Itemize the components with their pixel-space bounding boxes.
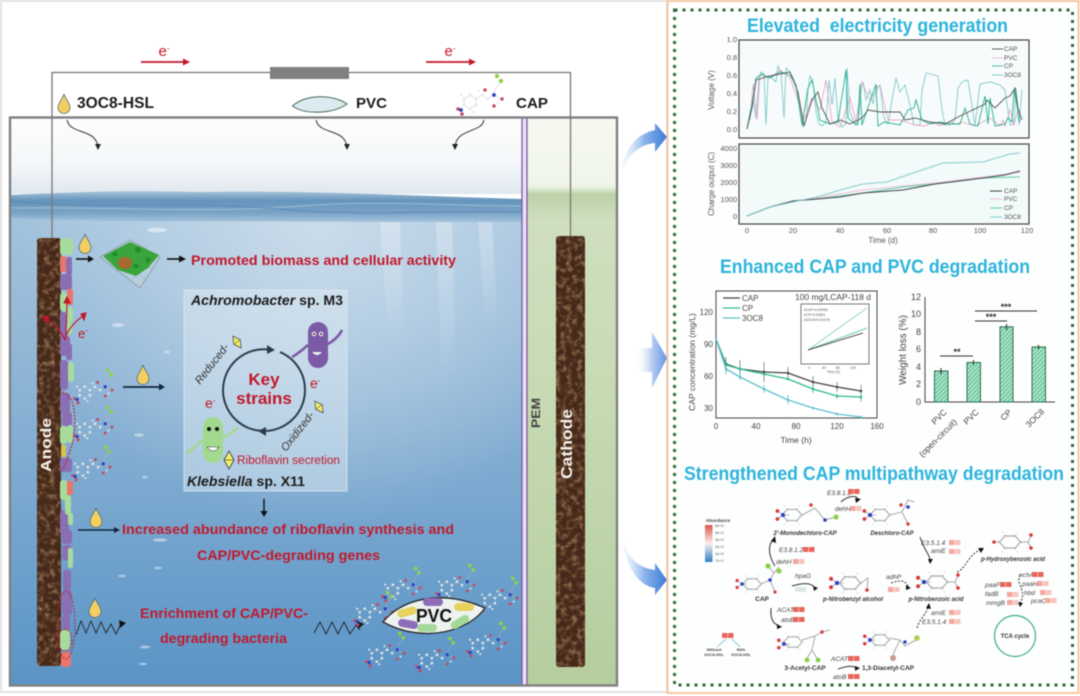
charge y axis labels bbox=[720, 144, 737, 221]
enzyme labels: ACAT bbox=[830, 656, 849, 663]
oxidized label: Oxidized- bbox=[279, 410, 317, 454]
bars bbox=[934, 327, 1046, 402]
electron arrow left: e bbox=[158, 43, 167, 60]
enzyme labels: E3.5.1.4 bbox=[921, 540, 946, 547]
enzyme labels: hbd bbox=[1024, 590, 1035, 597]
molecule: p-Hydroxybenzoic acid bbox=[980, 531, 1046, 563]
legend: CP bbox=[742, 304, 753, 313]
chart: charge output bbox=[707, 144, 1033, 245]
enzyme labels: dehH bbox=[776, 559, 792, 566]
y tick labels: 4 bbox=[916, 362, 921, 372]
time axis title: Time (d) bbox=[868, 236, 898, 245]
input: CAP bbox=[456, 74, 548, 116]
PEM label: PEM bbox=[529, 398, 543, 428]
anode chamber water bbox=[10, 218, 522, 685]
voltage legend bbox=[992, 46, 1021, 79]
electron arrow right: e bbox=[444, 43, 453, 60]
inset plot: 40 bbox=[822, 366, 826, 370]
time axis labels: 120 bbox=[1021, 226, 1033, 235]
inset plot: kCP=0.00501 bbox=[804, 313, 825, 317]
arrow: to pathways bbox=[622, 538, 667, 595]
electron arrow left: - bbox=[167, 44, 170, 53]
significance brackets bbox=[940, 311, 1037, 356]
electrons in cycle: - bbox=[213, 396, 216, 405]
riboflavin icon top bbox=[230, 334, 244, 350]
redox cycle bbox=[223, 349, 305, 431]
panel: microbial fuel cell bbox=[10, 43, 617, 686]
voltage legend: PVC bbox=[1004, 55, 1018, 62]
enzyme labels: E3.8.1.2 bbox=[827, 490, 852, 497]
inset plot: k3OC8=0.01078 bbox=[804, 318, 830, 322]
inset plot: 80 bbox=[836, 366, 840, 370]
enzyme labels: amiE bbox=[931, 610, 946, 617]
charge legend bbox=[990, 188, 1021, 221]
significance stars bbox=[953, 302, 1012, 357]
enzyme labels: mmgB bbox=[986, 600, 1005, 607]
voltage trace CP bbox=[747, 70, 1020, 129]
molecule: Deschloro-CAP: Deschloro-CAP bbox=[870, 530, 914, 537]
electrons in cycle: e bbox=[205, 395, 213, 411]
error bars bbox=[941, 324, 1038, 374]
row: gene abundance: CAP/PVC-degrading genes bbox=[197, 547, 380, 563]
cathode bbox=[556, 236, 585, 667]
x tick labels: 40 bbox=[752, 422, 761, 431]
enzyme labels: adhP bbox=[886, 574, 902, 581]
icon: biofilm on mesh bbox=[100, 240, 160, 288]
CAP molecules around PVC bbox=[353, 564, 518, 672]
series 3OC8 bbox=[716, 339, 862, 418]
enzyme labels: fadB bbox=[985, 591, 999, 598]
arrow: to degradation bbox=[637, 332, 667, 388]
time axis labels: 100 bbox=[974, 226, 986, 235]
abundance legend: 8e+2 bbox=[715, 523, 725, 528]
x tick labels: 80 bbox=[792, 422, 801, 431]
row: biomass: Promoted biomass and cellular activity bbox=[191, 252, 456, 268]
sample key: Without bbox=[707, 647, 722, 652]
bar labels: PVC bbox=[929, 407, 949, 427]
inset plot: 120 bbox=[850, 366, 856, 370]
inset plot: 0 bbox=[808, 366, 810, 370]
voltage axis title: Voltage (V) bbox=[707, 70, 716, 110]
light rays bbox=[380, 222, 498, 380]
enzyme labels bbox=[776, 490, 1046, 681]
x tick labels bbox=[714, 422, 884, 431]
arrow: to electricity bbox=[622, 123, 667, 168]
key strains label bbox=[236, 370, 292, 408]
y axis title: CAP concentration (mg/L) bbox=[687, 313, 697, 411]
tank outline bbox=[10, 118, 617, 686]
electrons in cycle: - bbox=[318, 376, 321, 385]
row: gene abundance bbox=[78, 508, 454, 563]
electron arrow left bbox=[141, 43, 190, 66]
input: 3OC8-HSL bbox=[58, 94, 154, 114]
redox cycle arrow heads bbox=[258, 345, 275, 436]
voltage trace CAP bbox=[747, 72, 1022, 129]
CAP molecules at anode bbox=[71, 369, 113, 481]
abundance legend: 3e+2 bbox=[715, 537, 725, 542]
sample key bbox=[704, 633, 751, 657]
voltage axis labels: 1.0 bbox=[727, 35, 737, 44]
reduced label: Reduced- bbox=[193, 342, 232, 387]
label: Klebsiella: Klebsiella sp. X11 bbox=[187, 474, 305, 489]
molecule: CAP bbox=[735, 563, 782, 603]
electrons in cycle bbox=[205, 375, 321, 411]
x tick labels: 0 bbox=[714, 422, 719, 431]
down arrow from key strains bbox=[260, 499, 268, 517]
panel: key strains bbox=[184, 290, 347, 491]
time axis labels: 80 bbox=[929, 226, 937, 235]
key strains label: strains bbox=[236, 389, 292, 408]
chart: CAP concentration bbox=[687, 291, 884, 445]
PVC particle with bacteria bbox=[353, 564, 518, 672]
bar labels bbox=[917, 406, 1046, 459]
voltage axis labels: 0.6 bbox=[727, 71, 737, 80]
abundance legend: 2e+2 bbox=[715, 544, 725, 549]
enzyme labels: amiE bbox=[931, 548, 946, 555]
molecule: 3-Acetyl-CAP: 3-Acetyl-CAP bbox=[784, 665, 826, 672]
voltage trace PVC bbox=[750, 70, 1018, 127]
TCA cycle bbox=[994, 616, 1036, 656]
enzyme labels: paaH bbox=[1021, 581, 1038, 588]
proton exchange membrane bbox=[522, 118, 527, 686]
x tick labels: 160 bbox=[870, 422, 884, 431]
curved arrow heads bbox=[95, 144, 458, 150]
enzyme labels: echA bbox=[1019, 572, 1034, 579]
electron arrow right: - bbox=[453, 44, 456, 53]
condition label: 100 mg/LCAP-118 d bbox=[795, 293, 871, 302]
pathway arrow heads bbox=[771, 498, 1023, 671]
legend bbox=[723, 294, 763, 323]
voltage trace 3OC8 bbox=[747, 66, 1022, 129]
enzyme labels: pcaC bbox=[1030, 598, 1046, 605]
enzyme abundance squares bbox=[793, 489, 1056, 679]
molecule: 3-Acetyl-CAP bbox=[777, 630, 830, 672]
y axis title: Weight loss (%) bbox=[898, 315, 909, 385]
row: biomass bbox=[76, 234, 456, 288]
curved arrows into tank bbox=[67, 120, 484, 147]
label: Achromobacter: Achromobacter sp. M3 bbox=[190, 293, 344, 308]
enzyme labels: E3.8.1.2 bbox=[779, 547, 804, 554]
voltage axis labels bbox=[727, 35, 737, 134]
page frame bbox=[1, 1, 667, 692]
molecule: p-Nitrobenzyl alcohol: p-Nitrobenzyl alcohol bbox=[822, 596, 883, 603]
error bars bbox=[726, 357, 861, 400]
voltage axis labels: 0.0 bbox=[727, 125, 737, 134]
tank air space bbox=[10, 118, 522, 194]
voltage legend: CAP bbox=[1004, 46, 1017, 53]
light glow in water bbox=[10, 218, 522, 685]
charge y axis labels: 1000 bbox=[720, 195, 737, 204]
resistor bbox=[270, 67, 349, 79]
y tick labels bbox=[700, 308, 714, 413]
input: 3OC8-HSL: 3OC8-HSL bbox=[77, 95, 154, 112]
electron transfer arrows on anode bbox=[43, 297, 88, 470]
enzyme labels: atoB bbox=[833, 674, 847, 681]
enzyme labels: E3.5.1.4 bbox=[922, 619, 947, 626]
riboflavin secretion: Riboflavin secretion bbox=[237, 455, 340, 467]
bacterium: Klebsiella bbox=[187, 417, 238, 463]
charge axis title: Charge output (C) bbox=[707, 152, 716, 216]
pathway arrows bbox=[769, 496, 1023, 669]
charge y axis labels: 0 bbox=[733, 212, 737, 221]
molecule: Deschloro-CAP bbox=[863, 500, 914, 537]
heading: electricity: Elevated electricity generation bbox=[747, 16, 1008, 37]
y tick labels: 12 bbox=[911, 292, 921, 302]
y tick labels: 60 bbox=[704, 372, 714, 381]
y tick labels: 8 bbox=[916, 327, 921, 337]
charge trace PVC bbox=[747, 172, 1020, 216]
riboflavin secretion bbox=[224, 451, 340, 469]
charge y axis labels: 2000 bbox=[720, 178, 737, 187]
sample key: 3OC8-HSL bbox=[731, 652, 751, 657]
heading: pathways: Strengthened CAP multipathway degradation bbox=[684, 464, 1064, 485]
voltage axis labels: 0.8 bbox=[727, 53, 737, 62]
water surface bbox=[10, 191, 522, 222]
sample key: 3OC8-HSL bbox=[704, 652, 724, 657]
row: gene abundance: Increased abundance of riboflavin synthesis and bbox=[122, 521, 454, 537]
orange border bbox=[668, 1, 1078, 693]
electron transfer arrows on anode: - bbox=[85, 326, 88, 335]
charge legend: PVC bbox=[1004, 196, 1018, 203]
inset plot: Time (h) bbox=[827, 370, 840, 374]
voltage legend: 3OC8 bbox=[1004, 72, 1021, 79]
abundance legend: 5e+2 bbox=[715, 530, 725, 535]
key strains label: Key bbox=[248, 370, 280, 389]
row: enrichment bbox=[57, 591, 364, 659]
row: enrichment: Enrichment of CAP/PVC- bbox=[140, 605, 308, 621]
bubbles bbox=[112, 228, 170, 665]
biofilm highlighted zone bbox=[57, 591, 75, 659]
molecule: 1,3-Diacetyl-CAP: 1,3-Diacetyl-CAP bbox=[862, 665, 915, 672]
chart: weight loss bbox=[898, 292, 1055, 459]
voltage legend: CP bbox=[1004, 63, 1013, 70]
molecule: CAP: CAP bbox=[755, 596, 770, 603]
panel: results bbox=[668, 1, 1078, 693]
signal wave right bbox=[314, 621, 364, 634]
charge legend: 3OC8 bbox=[1004, 214, 1021, 221]
bar labels: CP bbox=[998, 407, 1014, 423]
dotted frame bbox=[674, 10, 1072, 685]
charge y axis labels: 3000 bbox=[720, 161, 737, 170]
abundance legend: Abundance bbox=[706, 518, 731, 523]
enzyme labels: paaF bbox=[984, 582, 1001, 589]
input: PVC: PVC bbox=[356, 95, 387, 112]
bar labels: 3OC8 bbox=[1023, 406, 1046, 429]
abundance legend: 7e+1 bbox=[715, 558, 725, 563]
y tick labels bbox=[911, 292, 921, 407]
cathode chamber bbox=[527, 118, 617, 685]
charge trace 3OC8 bbox=[747, 153, 1020, 216]
charge trace CAP bbox=[747, 171, 1020, 216]
diagram: degradation pathways bbox=[704, 489, 1056, 681]
time axis labels: 0 bbox=[745, 226, 749, 235]
y tick labels: 10 bbox=[911, 309, 921, 319]
input: PVC bbox=[292, 95, 387, 112]
enzyme labels: hpaG bbox=[795, 573, 811, 580]
enzyme labels: atoB bbox=[781, 617, 795, 624]
enzyme labels: dehH bbox=[835, 506, 851, 513]
voltage axis labels: 0.4 bbox=[727, 89, 737, 98]
y tick labels: 2 bbox=[916, 379, 921, 389]
abundance legend bbox=[705, 518, 731, 563]
series CAP bbox=[716, 339, 862, 392]
time axis labels: 40 bbox=[836, 226, 844, 235]
charge legend: CAP bbox=[1004, 188, 1017, 195]
row: enrichment: degrading bacteria bbox=[160, 630, 287, 646]
charge y axis labels: 4000 bbox=[720, 144, 737, 153]
external circuit wire bbox=[52, 72, 570, 238]
biofilm bacteria on anode bbox=[60, 238, 74, 667]
time axis labels bbox=[745, 226, 1033, 235]
y tick labels: 120 bbox=[700, 308, 714, 317]
PVC particle with bacteria: PVC bbox=[416, 606, 452, 626]
anode: Anode bbox=[38, 418, 55, 472]
legend: 3OC8 bbox=[742, 314, 763, 323]
y tick labels: 6 bbox=[916, 344, 921, 354]
significance stars: ** bbox=[953, 347, 961, 357]
anode bbox=[37, 238, 61, 666]
x axis title: Time (h) bbox=[780, 435, 812, 445]
time axis labels: 60 bbox=[883, 226, 891, 235]
legend: CAP bbox=[742, 294, 758, 303]
y tick labels: 0 bbox=[916, 397, 921, 407]
sample key: With bbox=[737, 647, 746, 652]
error bars teal bbox=[726, 362, 861, 404]
time axis labels: 20 bbox=[789, 226, 797, 235]
molecule: 2'-Monodechloro-CAP: 2'-Monodechloro-CAP bbox=[773, 530, 837, 537]
y tick labels: 30 bbox=[704, 404, 714, 413]
bar labels: (open-circuit) bbox=[917, 417, 959, 459]
charge legend: CP bbox=[1004, 205, 1013, 212]
riboflavin icon right bbox=[312, 399, 326, 415]
chart: voltage bbox=[707, 35, 1029, 138]
molecule: 2'-Monodechloro-CAP bbox=[773, 503, 839, 537]
electrons in cycle: e bbox=[310, 375, 318, 391]
inset plot bbox=[801, 304, 869, 374]
input: CAP: CAP bbox=[516, 95, 548, 112]
bar labels: PVC bbox=[961, 407, 981, 427]
TCA cycle: TCA cycle bbox=[1001, 634, 1030, 640]
significance stars: *** bbox=[1001, 302, 1012, 312]
abundance legend: 1e+2 bbox=[715, 551, 725, 556]
axes bbox=[925, 297, 1055, 402]
signal wave left bbox=[76, 620, 126, 635]
bacterium: Achromobacter bbox=[292, 322, 342, 368]
enzyme labels: ACAT bbox=[776, 607, 795, 614]
heading: degradation: Enhanced CAP and PVC degradation bbox=[720, 257, 1030, 278]
voltage axis labels: 0.2 bbox=[727, 107, 737, 116]
y tick labels: 90 bbox=[704, 340, 714, 349]
inset plot: kCAP=0.00456 bbox=[804, 308, 828, 312]
molecule: p-Hydroxybenzoic acid: p-Hydroxybenzoic acid bbox=[980, 556, 1046, 563]
molecule: p-Nitrobenzoic acid: p-Nitrobenzoic acid bbox=[908, 596, 964, 603]
cathode: Cathode bbox=[559, 409, 576, 479]
electron transfer arrows on anode: e bbox=[78, 326, 85, 341]
x tick labels: 120 bbox=[830, 422, 844, 431]
molecule: 1,3-Diacetyl-CAP bbox=[862, 631, 920, 672]
molecule: p-Nitrobenzyl alcohol bbox=[822, 572, 883, 603]
significance stars: *** bbox=[986, 312, 997, 322]
charge trace CP bbox=[747, 177, 1020, 216]
electron arrow right bbox=[426, 43, 476, 66]
quorum signal and arrow bbox=[123, 365, 165, 390]
molecule: p-Nitrobenzoic acid bbox=[908, 571, 964, 603]
series CP bbox=[716, 339, 862, 398]
